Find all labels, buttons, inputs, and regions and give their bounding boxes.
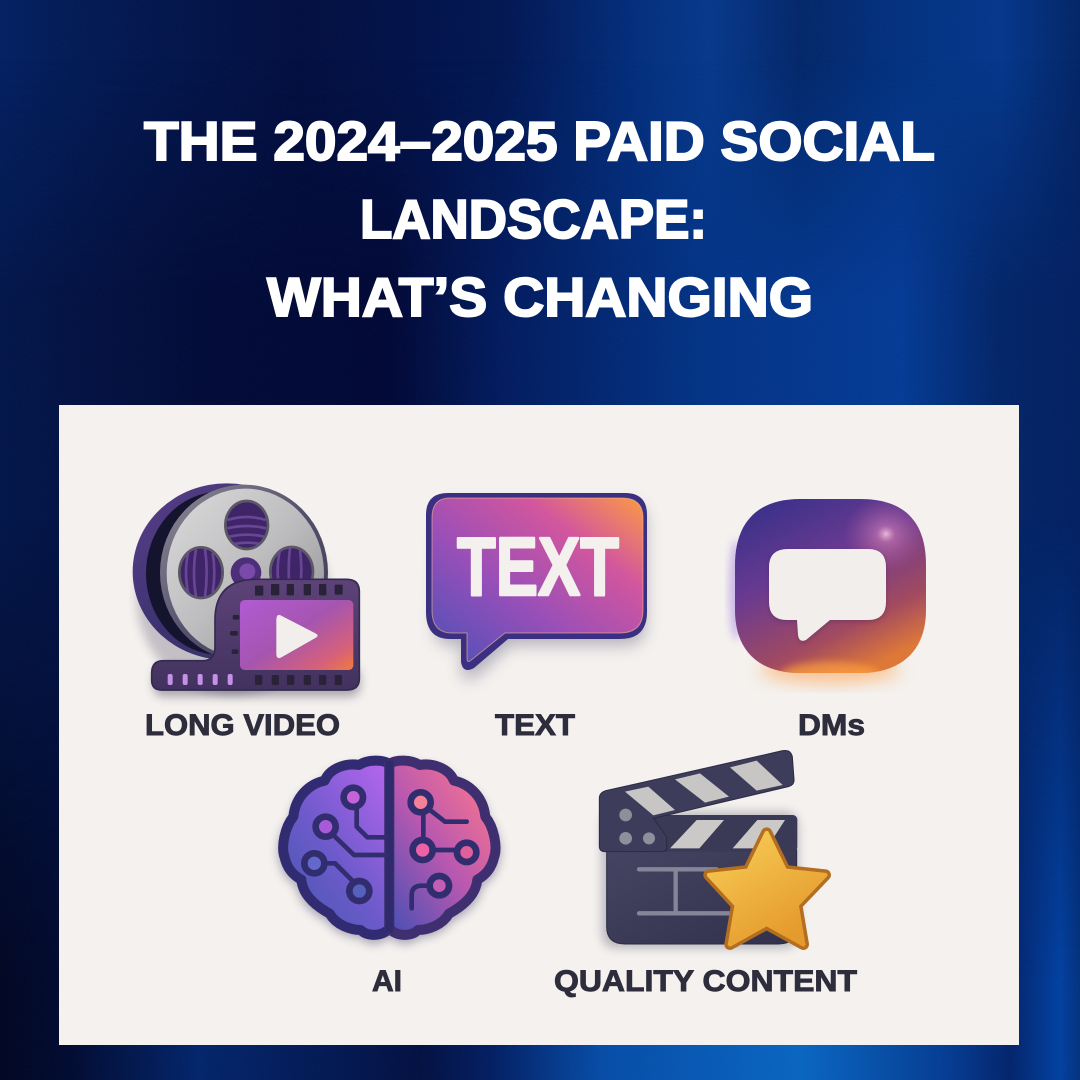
slate lines (639, 869, 730, 913)
right lobe (389, 761, 496, 935)
circuit traces (325, 807, 467, 908)
left lobe (283, 761, 389, 935)
icon: AI brain with circuits (278, 761, 501, 944)
icon: film reel with play strip (133, 483, 360, 697)
chat bubble (769, 551, 886, 643)
icon: DMs rounded app tile (729, 496, 928, 690)
label: long video: LONG VIDEO (145, 709, 340, 742)
label: text: TEXT (495, 709, 575, 742)
clapper body (607, 850, 797, 944)
gold star (709, 833, 825, 944)
film strip (152, 579, 359, 690)
title: WHAT’S CHANGING (267, 266, 813, 328)
label: AI: AI (372, 965, 402, 998)
hinge bolts (619, 809, 655, 845)
play button (276, 615, 318, 658)
hinged clapper arm (599, 750, 794, 852)
panel: icon grid (59, 405, 1019, 1045)
label: DMs: DMs (798, 709, 865, 742)
bubble word: TEXT (457, 520, 619, 613)
video screen (240, 600, 353, 670)
reel holes (179, 501, 313, 598)
sprocket holes (230, 584, 343, 685)
lower clapper band (599, 815, 797, 852)
icon: TEXT speech bubble (426, 493, 647, 678)
circuit nodes (304, 788, 476, 901)
reel hub (231, 557, 261, 588)
label: quality content: QUALITY CONTENT (554, 965, 857, 998)
centre fissure (377, 761, 401, 933)
title: THE 2024–2025 PAID SOCIAL (144, 110, 935, 172)
title (144, 110, 935, 328)
title: LANDSCAPE: (360, 188, 707, 250)
icon: clapperboard with gold star (599, 750, 825, 948)
